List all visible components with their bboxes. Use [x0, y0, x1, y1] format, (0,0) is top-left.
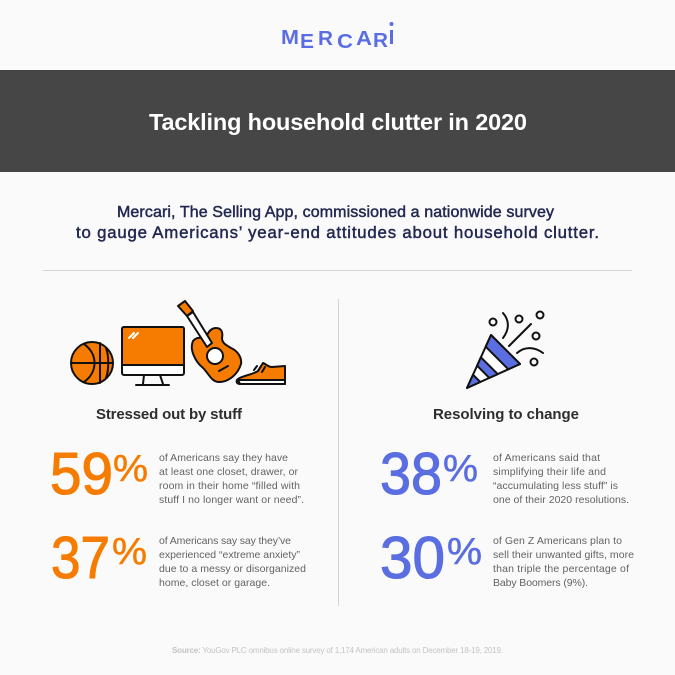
icon: guitar — [178, 301, 241, 382]
stat: 38%: 38 — [380, 441, 442, 507]
logo: Mercari: R — [373, 30, 389, 52]
heading: Resolving to change: Resolving to change — [433, 406, 579, 423]
text: 37% description: experienced “extreme anxiety” — [159, 549, 300, 561]
text: 59% description: room in their home “filled with — [159, 480, 300, 492]
intro text: Mercari, The Selling App, commissioned a nationwide survey — [117, 204, 554, 221]
logo: Mercari: E — [300, 31, 314, 53]
stat: 38% — [380, 441, 478, 507]
icon: computer monitor — [122, 327, 184, 385]
logo: Mercari — [281, 22, 394, 53]
text: 38% description: of Americans said that — [493, 452, 600, 464]
logo: Mercari: M — [281, 27, 299, 49]
icon: sneaker — [237, 363, 285, 384]
logo: Mercari: A — [356, 28, 372, 50]
text: 37% description: home, closet or garage. — [159, 577, 270, 589]
text: 30% description: than triple the percentage of — [493, 563, 629, 575]
icon: basketball — [71, 342, 113, 384]
text: 30% description: sell their unwanted gifts, more — [493, 549, 634, 561]
text: 38% description: one of their 2020 resolutions. — [493, 494, 629, 506]
text: 30% description: Baby Boomers (9%). — [493, 577, 588, 589]
stat: 38%: % — [443, 448, 478, 490]
stat: 37%: % — [112, 531, 147, 573]
heading: Stressed out by stuff: Stressed out by stuff — [96, 406, 243, 423]
text: 38% description: “accumulating less stuff” is — [493, 480, 618, 492]
icon group: clutter items — [71, 301, 285, 385]
intro text: to gauge Americans’ year-end attitudes about household clutter. — [76, 223, 599, 242]
stat: 59% — [50, 441, 148, 507]
text: 30% description — [493, 535, 634, 589]
intro text — [76, 204, 599, 242]
text: 38% description: simplifying their life and — [493, 466, 606, 478]
source note: Source: YouGov PLC omnibus online survey of 1,174 American adults on December 18-19, 2019. — [172, 646, 503, 655]
text: 37% description: due to a messy or disorganized — [159, 563, 306, 575]
title banner — [0, 70, 675, 172]
stat: 30% — [380, 525, 482, 591]
stat: 37% — [51, 525, 147, 591]
text: 38% description — [493, 452, 629, 506]
stat: 37%: 37 — [51, 525, 110, 591]
logo: Mercari: C — [337, 31, 353, 53]
logo: Mercari: R — [318, 28, 334, 50]
text: 30% description: of Gen Z Americans plan to — [493, 535, 622, 547]
text: 59% description: stuff I no longer want or need”. — [159, 494, 304, 506]
icon: party popper — [467, 312, 544, 388]
stat: 59%: % — [113, 448, 148, 490]
stat: 59%: 59 — [50, 441, 113, 507]
title banner: Tackling household clutter in 2020 — [149, 109, 527, 135]
text: 37% description: of Americans say say they’ve — [159, 535, 291, 547]
stat: 30%: % — [447, 531, 482, 573]
text: 59% description: at least one closet, drawer, or — [159, 466, 298, 478]
text: 59% description — [159, 452, 304, 506]
text: 37% description — [159, 535, 306, 589]
stat: 30%: 30 — [380, 525, 445, 591]
text: 59% description: of Americans say they have — [159, 452, 288, 464]
